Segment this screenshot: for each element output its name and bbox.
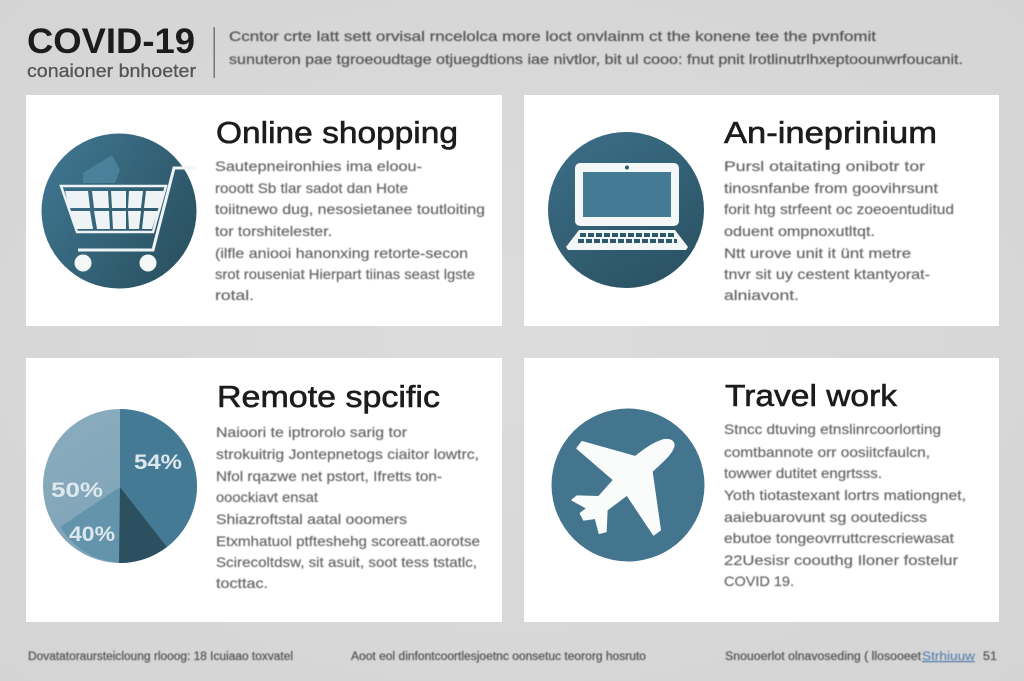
panel: travel	[524, 358, 999, 622]
text block: Etxmhatuol ptfteshehg scoreatt.aorotse	[216, 533, 480, 549]
footer link: Strhiuuw	[922, 651, 976, 663]
text block	[216, 424, 480, 591]
page number: 51	[983, 651, 997, 663]
text block: COVID 19.	[724, 573, 794, 589]
heading: Travel work	[725, 379, 898, 413]
label 54%: 54%	[134, 451, 182, 474]
text block: Sautepneironhies ima eloou-	[215, 158, 422, 174]
text block	[724, 421, 966, 589]
text block: strokuitrig Jontepnetogs ciaitor lowtrc,	[216, 446, 479, 462]
text block: tinosnfanbe from goovihrsunt	[724, 180, 938, 196]
text block: aaiebuarovunt sg ooutedicss	[724, 509, 927, 525]
footer note right: Snouoerlot olnavoseding ( llosooeet	[725, 651, 922, 663]
heading: An-ineprinium	[724, 116, 937, 150]
intro text	[229, 28, 963, 67]
text block: ebutoe tongeovrruttcrescriewasat	[724, 530, 954, 546]
text block: Ntt urove unit it ünt metre	[724, 245, 911, 261]
text block: oduent ompnoxutltqt.	[724, 223, 875, 239]
text block: Scirecoltdsw, sit asuit, soot tess tstatlc,	[216, 554, 477, 570]
text block: Naioori te iptrorolo sarig tor	[216, 424, 407, 440]
panel: online shopping	[26, 95, 502, 326]
icon: airplane	[552, 408, 704, 562]
footer note center: Aoot eol dinfontcoortlesjoetnc oonsetuc teororg hosruto	[351, 651, 646, 663]
text block: tor torshitelester.	[215, 223, 332, 239]
text block: (ilfle aniooi hanonxing retorte-secon	[215, 245, 468, 261]
text block: rotal.	[215, 287, 254, 303]
heading: Online shopping	[216, 116, 458, 150]
panel: laptop	[524, 95, 999, 326]
text block	[724, 158, 954, 303]
text block: forit htg strfeent oc zoeoentuditud	[724, 201, 954, 217]
footer	[28, 651, 997, 663]
text block: srot rouseniat Hierpart tiinas seast lgste	[215, 266, 475, 282]
text block: comtbannote orr oosiitcfaulcn,	[724, 444, 930, 460]
text block: Shiazroftstal aatal ooomers	[216, 511, 407, 527]
header	[27, 22, 963, 81]
intro text: sunuteron pae tgroeoudtage otjuegdtions iae nivtlor, bit ul cooo: fnut pnit lrotlinutrlhxeptoounwrfoucanit.	[229, 51, 963, 67]
text block: tnvr sit uy cestent ktantyorat-	[724, 266, 930, 282]
header divider	[214, 27, 215, 78]
text block: toiitnewo dug, nesosietanee toutloiting	[215, 201, 485, 217]
text block: towwer dutitet engrtsss.	[724, 465, 882, 481]
intro text: Ccntor crte latt sett orvisal rncelolca more loct onvlainm ct the konene tee the pvnfomit	[229, 28, 876, 44]
icon: laptop	[548, 132, 704, 288]
label 40%: 40%	[69, 523, 115, 546]
subtitle: conaioner bnhoeter	[27, 60, 196, 81]
title: COVID-19	[27, 22, 195, 61]
text block: tocttac.	[216, 575, 268, 591]
text block	[215, 158, 485, 303]
pie chart	[43, 409, 197, 563]
footer note left: Dovatatoraursteicloung rlooog: 18 Icuiaao toxvatel	[28, 651, 293, 663]
label 50%: 50%	[51, 479, 103, 502]
text block: rooott Sb tlar sadot dan Hote	[215, 180, 408, 196]
text block: 22Uesisr coouthg Iloner fostelur	[724, 552, 958, 568]
text block: ooockiavt ensat	[216, 489, 318, 505]
text block: Yoth tiotastexant lortrs mationgnet,	[724, 487, 966, 503]
panel: pie chart	[26, 358, 502, 622]
icon: shopping cart	[42, 134, 196, 288]
text block: Nfol rqazwe net pstort, Ifretts ton-	[216, 468, 442, 484]
text block: Pursl otaitating onibotr tor	[724, 158, 925, 174]
text block: alniavont.	[724, 287, 799, 303]
text block: Stncc dtuving etnslinrcoorlorting	[724, 421, 941, 437]
heading: Remote spcific	[217, 380, 440, 414]
